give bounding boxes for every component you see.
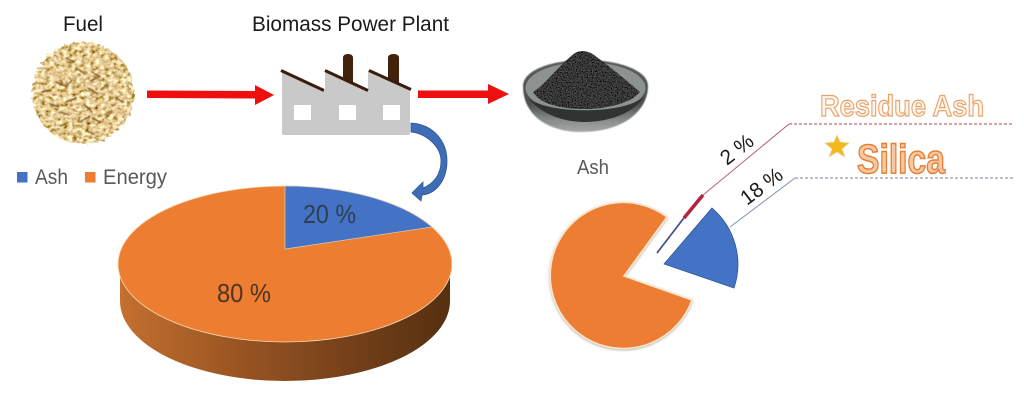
slice: residue 2% [657,195,703,253]
bowl [523,60,648,132]
ash heap [533,51,640,109]
pie slice: energy 80% [118,186,452,342]
chart: exploded ash pie [550,195,738,348]
leader line: residue ash [703,124,789,195]
label: Residue Ash: Residue Ash [820,90,984,123]
leader line: silica [730,178,795,227]
label: Silica: Silica [857,136,946,182]
legend [17,166,167,189]
value: 80 %: 80 % [217,278,271,308]
arrow: curved blue to pie [411,123,447,201]
pie side wall [120,268,450,381]
icon: factory [281,54,411,135]
factory body [282,70,410,135]
arrow: plant to ash [418,84,509,104]
icon: star [825,135,849,157]
value: 20 %: 20 % [303,199,356,229]
slice: silica 18% [664,208,738,288]
chimneys [343,54,399,86]
label: Biomass Power Plant: Biomass Power Plant [252,13,449,36]
factory windows [294,105,400,120]
value: 18 %: 18 % [736,163,788,210]
image: ash bowl [523,51,648,132]
legend: Ash [35,166,68,189]
factory roof lines [281,70,411,90]
label: Fuel: Fuel [63,13,103,36]
chart: 3D pie energy vs ash [118,186,452,381]
image: rice husk fuel pile [32,42,134,144]
slice: remaining ash [550,202,692,348]
arrow: fuel to plant [147,85,274,105]
pie slice: ash 20% [285,186,432,249]
legend: Energy [103,166,167,189]
value: 2 %: 2 % [716,130,758,170]
label: Ash: Ash [577,157,609,179]
